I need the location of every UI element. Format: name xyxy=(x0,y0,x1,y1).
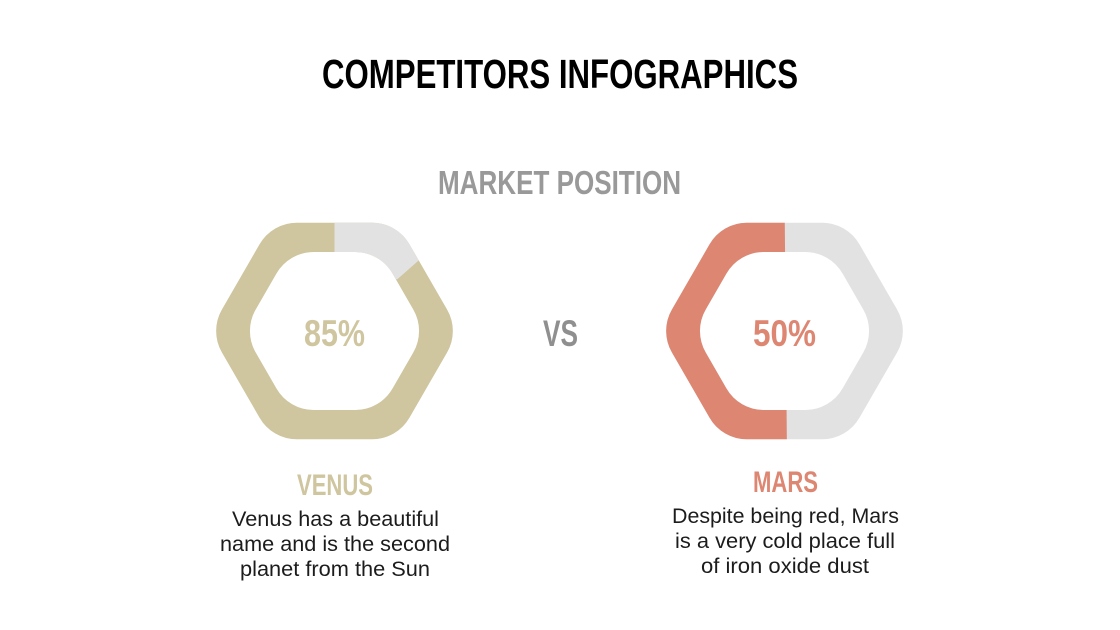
venus description: Venus has a beautiful xyxy=(232,508,439,531)
mars description xyxy=(672,505,899,578)
versus label: VS xyxy=(543,313,578,354)
venus description: planet from the Sun xyxy=(240,558,430,581)
venus hexagon donut chart: 85% xyxy=(216,223,453,439)
mars description: is a very cold place full xyxy=(675,530,895,553)
venus description xyxy=(220,508,450,581)
mars percentage: 50% xyxy=(753,313,816,354)
venus percentage: 85% xyxy=(304,313,365,354)
venus description: name and is the second xyxy=(220,533,450,556)
subtitle: market position: MARKET POSITION xyxy=(438,164,681,201)
mars description: of iron oxide dust xyxy=(701,555,869,578)
venus heading: VENUS xyxy=(297,469,373,502)
mars description: Despite being red, Mars xyxy=(672,505,899,528)
mars heading: MARS xyxy=(753,466,818,499)
mars hexagon donut chart: 50% xyxy=(666,223,903,439)
title: COMPETITORS INFOGRAPHICS xyxy=(322,51,798,97)
